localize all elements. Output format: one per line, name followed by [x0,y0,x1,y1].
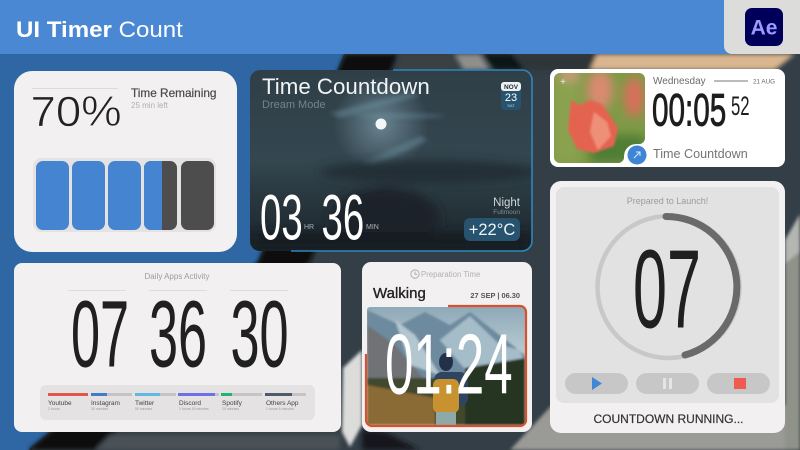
percentage: 70% [30,88,122,136]
icon: date badge [501,82,521,110]
panel: daily apps activity [14,263,341,432]
battery bars [33,158,216,232]
hours label: HR [304,224,314,231]
red border accent [366,306,526,426]
heading: Daily Apps Activity [145,272,209,281]
header bar [0,0,800,54]
legend: youtube: 2 hours [48,407,60,411]
subheading: Dream Mode [262,99,326,111]
temperature [464,218,520,241]
timer hours: 03 [260,183,303,254]
timer: 01:24 [385,317,513,412]
timer minutes: 36 [322,183,364,254]
legend: others: Others App [266,400,299,407]
timer: 00:05 [652,85,726,136]
hours digits: 07 [71,282,129,388]
legend: instagram: Instagram [91,400,120,407]
legend: discord: 1 hours 30 minutes [179,407,209,411]
legend: discord [178,393,219,411]
label: Preparation Time [421,270,480,279]
icon: plus mark: + [560,77,566,88]
icon: Ae logo: Ae [751,16,777,40]
button: play [565,373,628,394]
icon: date badge: SAT [507,103,515,108]
panel: tulip timer [550,69,785,167]
date: 27 SEP | 06.30 [470,291,520,300]
legend: twitter: 50 minutes [135,407,152,411]
panel: time remaining [14,71,237,252]
progress ring [598,216,740,358]
title: UI Timer Count [16,17,183,42]
legend: others: 1 hours 6 minutes [266,407,294,411]
seconds digits: 30 [230,282,289,388]
panel: after effects badge [724,0,800,54]
panel: launch countdown [550,181,785,433]
legend: others [265,393,306,411]
legend: spotify [221,393,262,411]
icon: date badge: 23 [505,92,517,104]
minutes label: MIN [366,224,379,231]
photo: hiker and mountains [367,307,525,425]
condition: Night [493,197,521,209]
icon: arrow button [628,146,646,164]
photo: tulip [554,69,645,163]
minutes digits: 36 [149,282,207,388]
legend: youtube [48,393,88,411]
legend: youtube: Youtube [48,400,72,407]
button: pause [636,373,699,394]
moon phase: Fullmoon [493,209,520,216]
status: COUNTDOWN RUNNING... [594,412,744,426]
heading: Time Remaining [131,86,216,100]
panel: preparation time [362,262,532,432]
legend: twitter: Twitter [135,400,155,407]
label: Time Countdown [653,147,748,161]
legend: spotify: 20 minutes [222,407,239,411]
count digits: 07 [633,227,701,351]
date: 21 AUG [753,78,775,86]
legend panel [40,385,315,420]
subtext: 25 min left [131,101,169,110]
legend: instagram [91,393,132,411]
legend: discord: Discord [179,400,201,407]
day: Wednesday [653,76,706,87]
legend: twitter [135,393,176,411]
blue border accent [291,70,532,251]
legend: spotify: Spotify [222,400,243,407]
icon: clock [411,270,419,278]
label: Prepared to Launch! [627,196,708,206]
legend: instagram: 30 minutes [91,407,108,411]
temperature: +22°C [469,221,515,239]
seconds: 52 [731,91,750,121]
activity: Walking [373,285,426,302]
heading: Time Countdown [262,74,430,99]
button: stop [707,373,770,394]
hiker [433,353,468,425]
icon: date badge: NOV [504,84,519,91]
panel: night countdown [250,70,540,254]
